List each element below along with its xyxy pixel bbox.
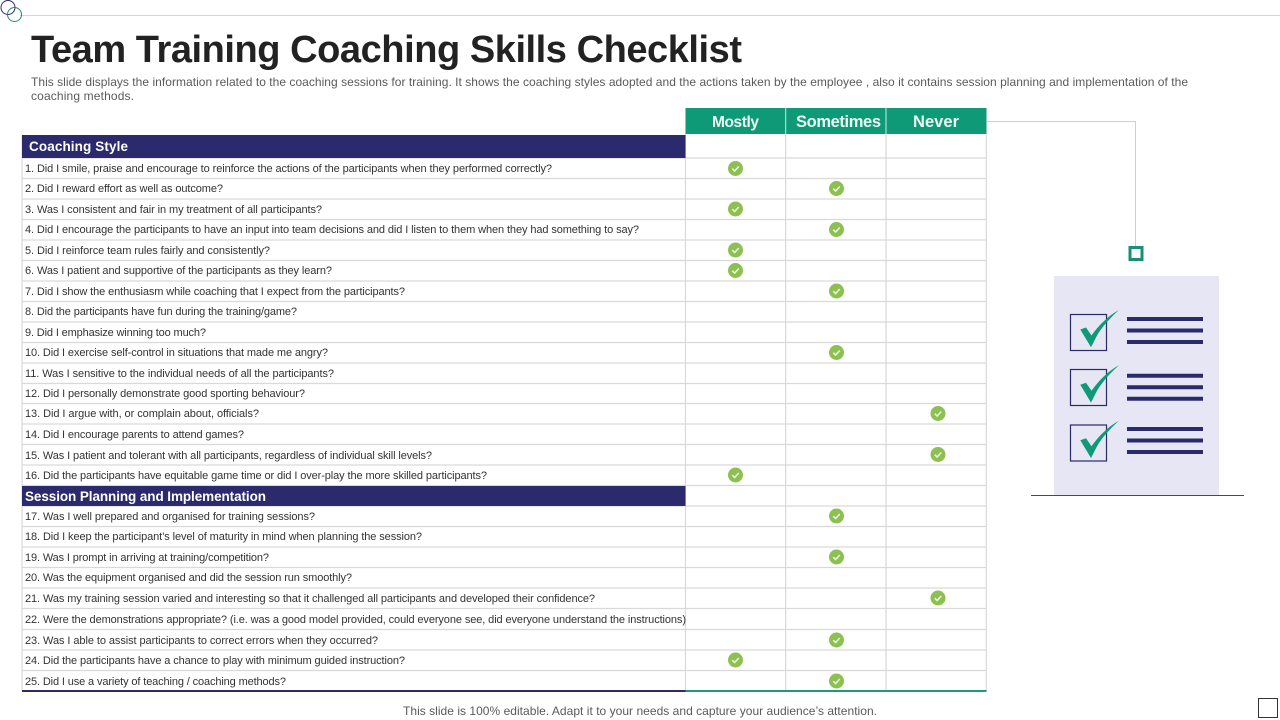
checklist questions: 11. Was I sensitive to the individual needs of all the participants? [25,368,334,380]
section header: Session Planning and Implementation: Session Planning and Implementation [25,489,266,504]
checklist questions: 10. Did I exercise self-control in situations that made me angry? [25,347,328,359]
connector line [987,122,1136,247]
checklist questions: 24. Did the participants have a chance to play with minimum guided instruction? [25,655,405,667]
checklist questions: 21. Was my training session varied and interesting so that it challenged all participants and developed their confidence? [25,593,595,605]
table grid [22,134,986,691]
description: coaching methods. [31,89,134,103]
checklist questions: 5. Did I reinforce team rules fairly and consistently? [25,245,270,257]
title: Team Training Coaching Skills Checklist [31,29,742,71]
checklist item 3 [1070,421,1203,461]
checklist questions [25,163,686,688]
checklist questions: 2. Did I reward effort as well as outcome? [25,183,223,195]
column headers: Sometimes [796,113,881,131]
checklist questions: 14. Did I encourage parents to attend games? [25,429,244,441]
checklist questions: 25. Did I use a variety of teaching / coaching methods? [25,676,286,688]
illustration: checklist document [1031,276,1244,496]
checklist questions: 17. Was I well prepared and organised for training sessions? [25,511,315,523]
column headers [686,108,986,134]
description [31,75,1188,103]
checklist questions: 1. Did I smile, praise and encourage to reinforce the actions of the participants when they performed correctly? [25,163,552,175]
checklist questions: 15. Was I patient and tolerant with all participants, regardless of individual skill levels? [25,450,432,462]
checklist questions: 4. Did I encourage the participants to have an input into team decisions and did I listen to them when they had something to say? [25,224,639,236]
column headers: Mostly [712,114,759,131]
checklist questions: 3. Was I consistent and fair in my treatment of all participants? [25,204,322,216]
checklist questions: 13. Did I argue with, or complain about, officials? [25,408,259,420]
checklist questions: 16. Did the participants have equitable game time or did I over-play the more skilled participants? [25,470,487,482]
connector end square [1130,248,1142,260]
section header: Coaching Style: Coaching Style [29,139,128,154]
checklist questions: 23. Was I able to assist participants to correct errors when they occurred? [25,635,378,647]
corner square icon [1258,698,1278,718]
checklist questions: 19. Was I prompt in arriving at training/competition? [25,552,269,564]
checklist questions: 8. Did the participants have fun during the training/game? [25,306,297,318]
section header: Coaching Style [22,135,686,158]
checklist questions: 9. Did I emphasize winning too much? [25,327,206,339]
checklist questions: 20. Was the equipment organised and did the session run smoothly? [25,572,352,584]
description: This slide displays the information related to the coaching sessions for training. It shows the coaching styles adopted and the actions taken by the employee , also it contains session planning and implementation of the [31,75,1188,89]
checklist questions: 12. Did I personally demonstrate good sporting behaviour? [25,388,305,400]
checklist item 2 [1070,365,1203,406]
section header: Session Planning and Implementation [22,486,686,506]
column headers: Never [913,113,960,131]
checklist questions: 18. Did I keep the participant’s level of maturity in mind when planning the session? [25,531,422,543]
checklist questions: 6. Was I patient and supportive of the participants as they learn? [25,265,332,277]
checklist questions: 7. Did I show the enthusiasm while coaching that I expect from the participants? [25,286,405,298]
checklist questions: 22. Were the demonstrations appropriate? (i.e. was a good model provided, could everyone see, did everyone understand the instructions) [25,614,686,626]
table bottom border [22,690,986,692]
decorative header rule and circles [1,0,1280,22]
check marks [728,161,946,688]
checklist table [22,108,986,692]
footer note: This slide is 100% editable. Adapt it to your needs and capture your audience’s attention. [403,704,877,718]
checklist item 1 [1070,310,1203,350]
